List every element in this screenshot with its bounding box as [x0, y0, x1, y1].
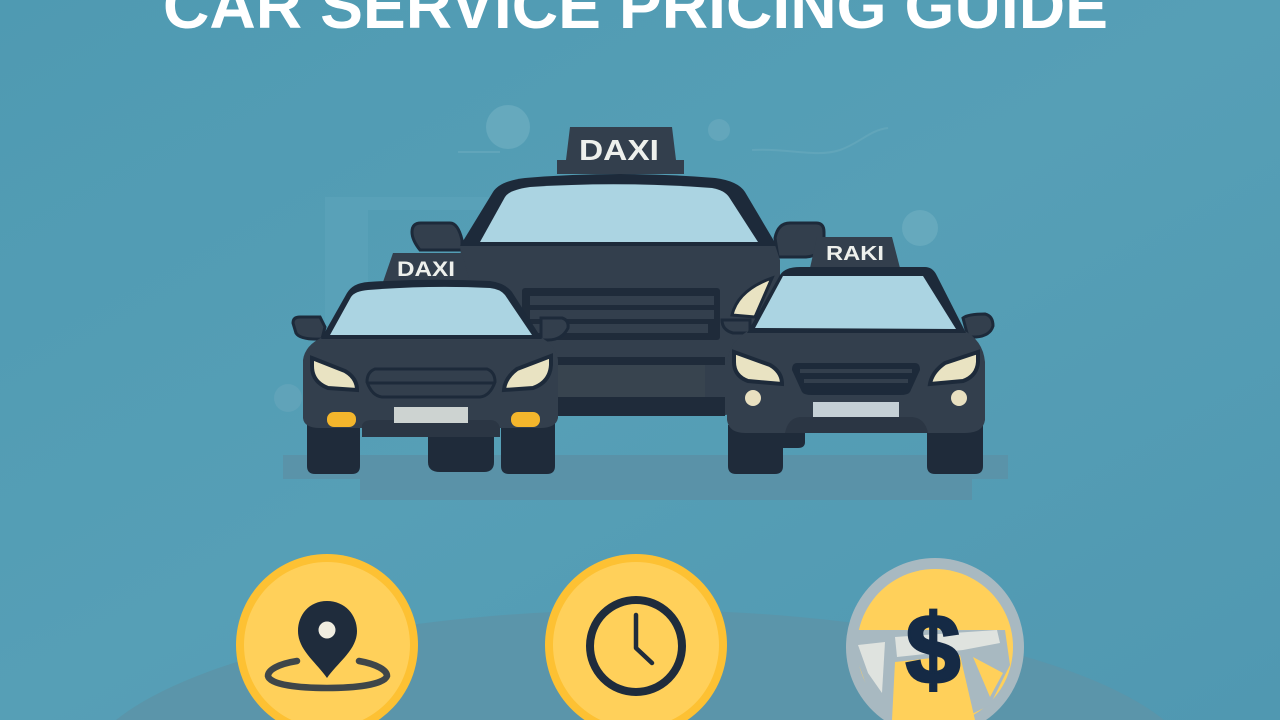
right taxi roof sign: RAKI	[826, 243, 884, 265]
right taxi fog lights	[745, 390, 967, 406]
right taxi windshield	[755, 276, 956, 329]
right taxi licence plate	[813, 402, 899, 417]
right taxi body	[727, 330, 985, 433]
large centre taxi	[412, 127, 824, 472]
large taxi lower bumper	[555, 357, 725, 416]
map pieces	[857, 630, 1010, 720]
left taxi roof sign: DAXI	[397, 258, 455, 281]
background decorations	[274, 105, 938, 412]
large taxi wheels	[428, 430, 805, 472]
left taxi licence plate	[394, 407, 468, 423]
left taxi lower bumper	[362, 420, 500, 437]
large taxi windshield	[480, 184, 758, 242]
left taxi wheels	[307, 420, 555, 474]
large taxi roof sign: DAXI	[579, 135, 659, 167]
large taxi headlight	[732, 278, 772, 317]
left taxi windshield frame	[321, 280, 542, 339]
large taxi windshield frame	[460, 174, 777, 246]
icon: location pin	[236, 554, 418, 720]
left small taxi	[293, 253, 568, 474]
right taxi roof sign	[810, 237, 900, 268]
right taxi wheels	[728, 425, 983, 474]
icon: dollar with map	[846, 558, 1024, 720]
right small taxi	[722, 237, 993, 474]
left taxi fog lights	[327, 412, 540, 427]
right taxi mirrors	[722, 314, 993, 337]
icon: dollar with map: $	[906, 594, 960, 704]
ground shadow bands	[283, 455, 1008, 500]
right taxi headlights	[734, 352, 978, 384]
right taxi windshield frame	[747, 267, 966, 333]
left taxi headlights	[312, 356, 551, 390]
left taxi windshield	[330, 287, 532, 335]
left taxi grille	[367, 369, 495, 397]
left taxi body	[303, 337, 558, 428]
large taxi body	[460, 245, 780, 416]
large taxi mirrors	[412, 223, 824, 257]
left taxi roof sign	[383, 253, 470, 282]
large taxi roof sign	[557, 127, 684, 174]
right taxi lower bumper	[785, 417, 928, 433]
large taxi grille	[522, 288, 720, 340]
bottom hill	[116, 610, 1164, 720]
icon: clock	[545, 554, 727, 720]
right taxi grille	[792, 363, 920, 395]
left taxi mirrors	[293, 317, 568, 340]
